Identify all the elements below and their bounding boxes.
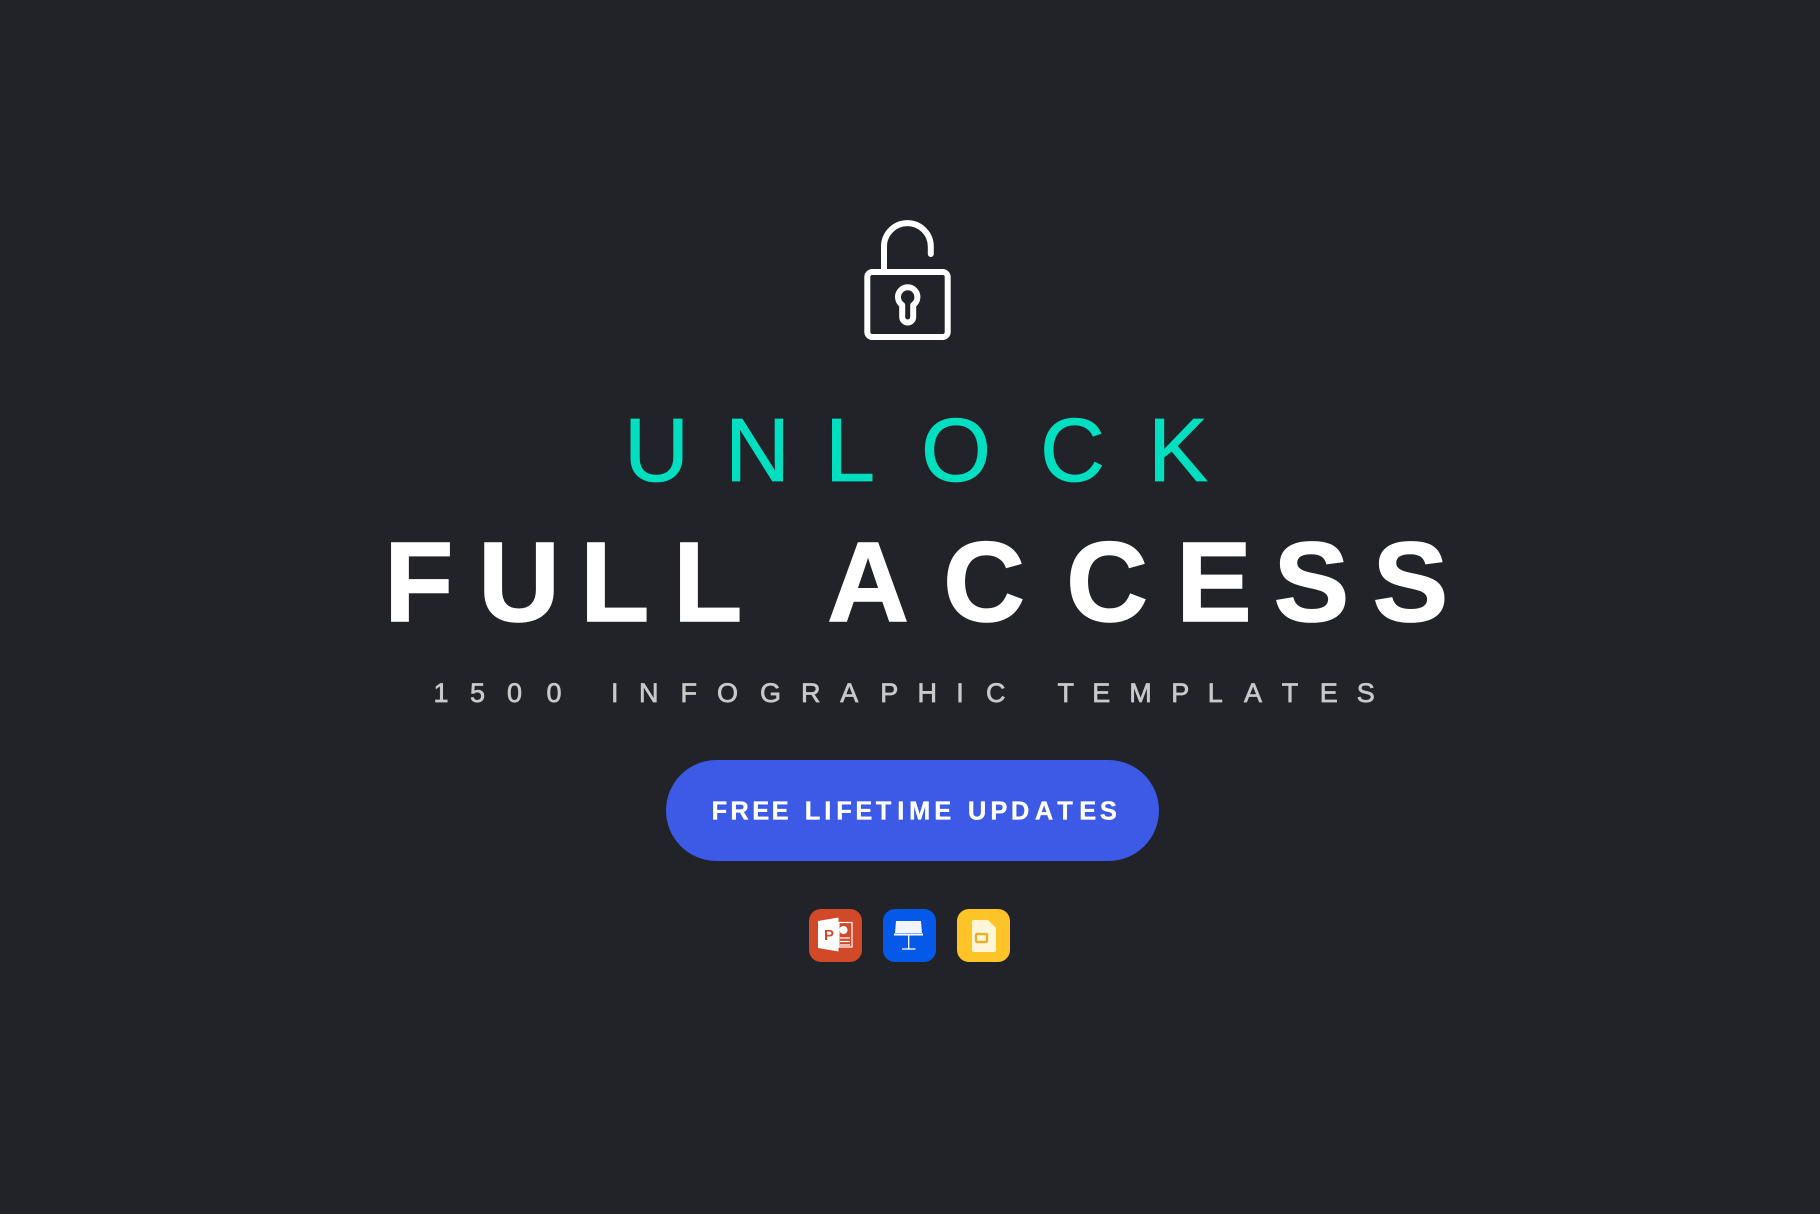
icon: Keynote — [883, 909, 936, 962]
heading: UNLOCK: UNLOCK — [624, 401, 1208, 501]
button: free lifetime updates — [666, 760, 1159, 861]
icon: PowerPoint — [809, 909, 862, 962]
subheading: 1500 infographic templates: 1500 INFOGRAPHIC TEMPLATES — [434, 678, 1375, 708]
icon: open padlock — [867, 223, 948, 337]
icon: PowerPoint: P — [824, 927, 834, 944]
button: free lifetime updates: FREE LIFETIME UPDATES — [712, 798, 1117, 826]
icon: Google Slides — [957, 909, 1010, 962]
heading: FULL ACCESS: FULL ACCESS — [384, 519, 1448, 645]
